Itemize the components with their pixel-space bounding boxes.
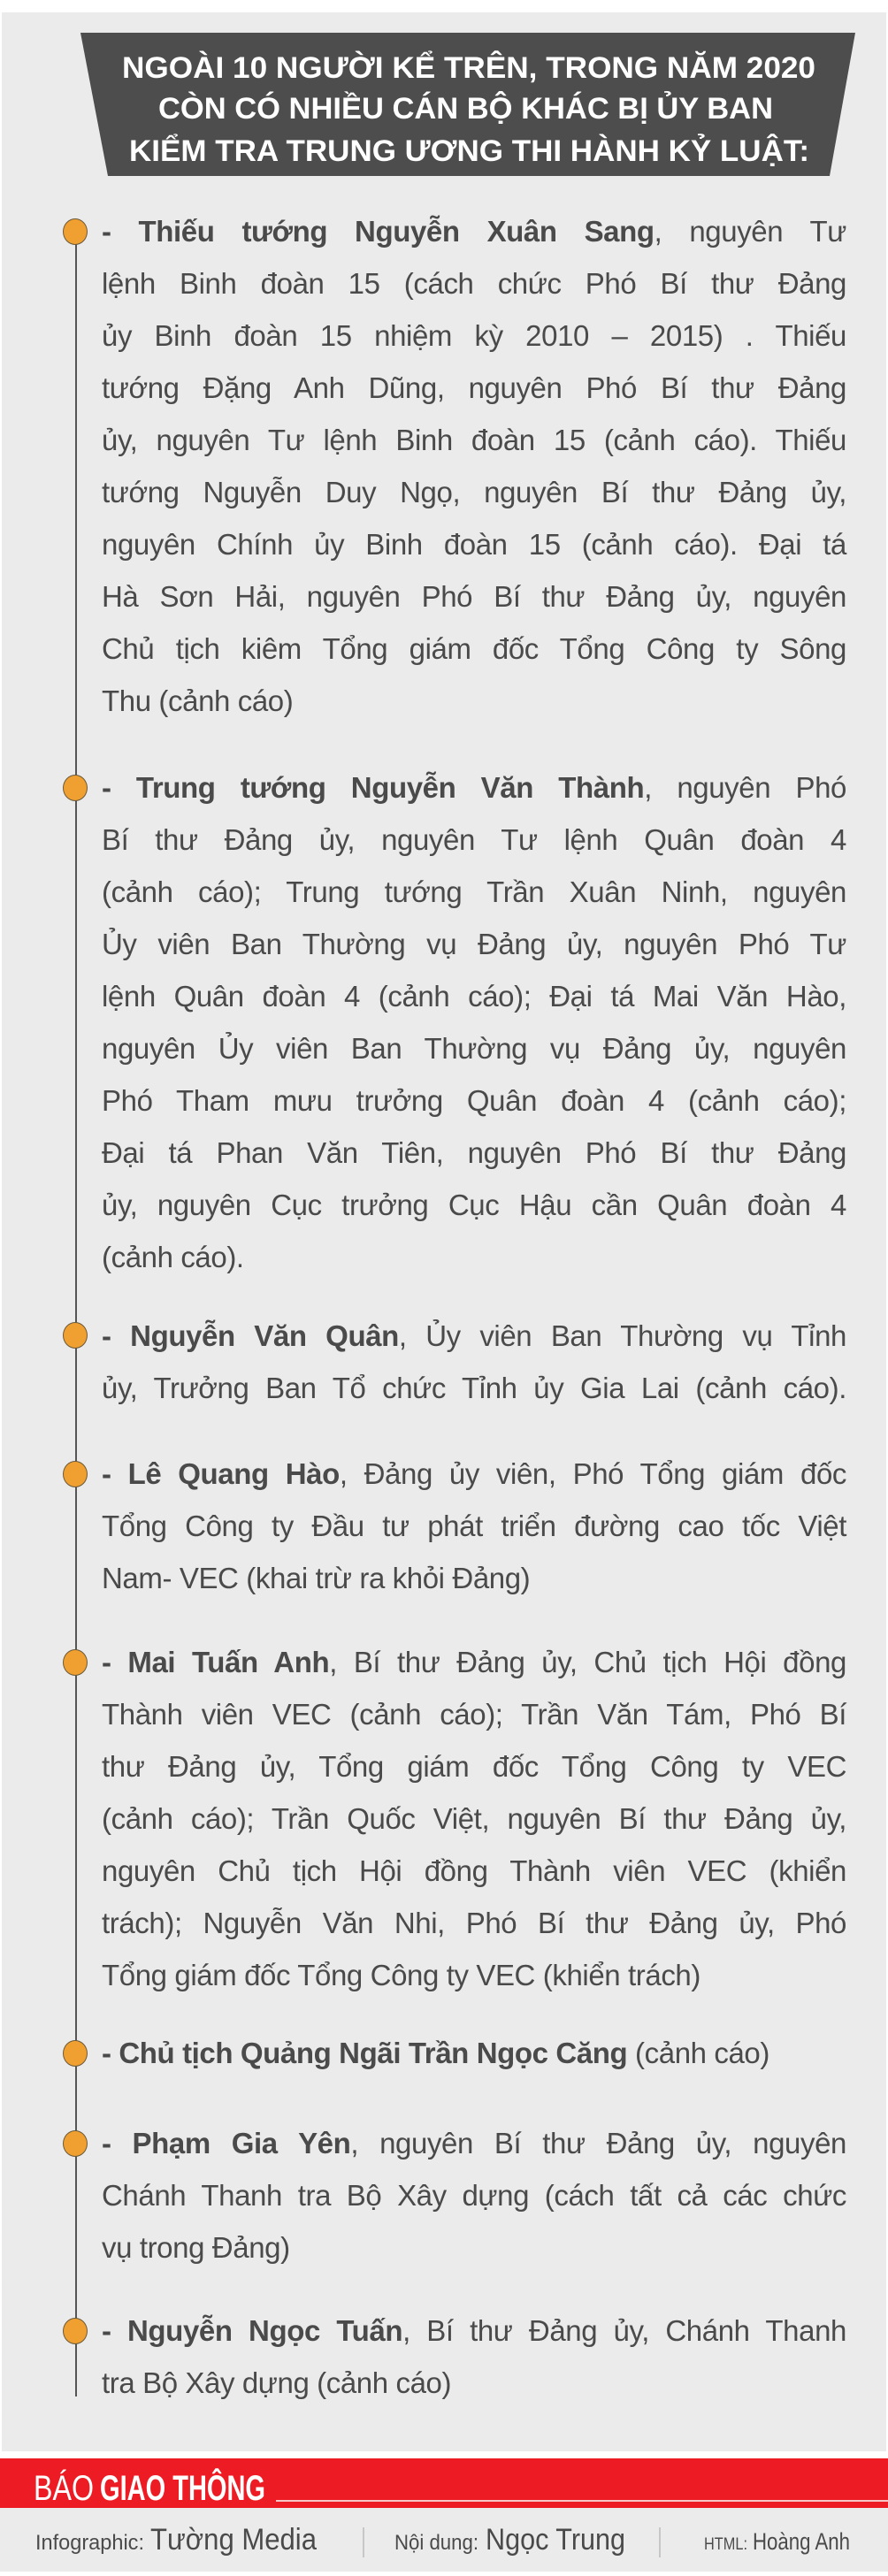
paragraph 1: lệnh Binh đoàn 15 (cách chức Phó Bí thư Đảng — [102, 267, 846, 300]
title banner: CÒN CÓ NHIỀU CÁN BỘ KHÁC BỊ ỦY BAN — [158, 91, 773, 126]
footer: credits: Tường Media — [150, 2523, 317, 2557]
bullet 8 — [63, 2318, 88, 2344]
paragraph 1: Hà Sơn Hải, nguyên Phó Bí thư Đảng ủy, nguyên — [102, 580, 846, 613]
paragraph 1: ủy, nguyên Tư lệnh Binh đoàn 15 (cảnh cáo). Thiếu — [102, 424, 846, 456]
logo: BÁO — [34, 2468, 94, 2508]
footer: credits: HTML: — [704, 2535, 747, 2554]
timeline line — [75, 232, 77, 2396]
footer: credits: Nội dung: — [394, 2531, 478, 2555]
paragraph 1: nguyên Chính ủy Binh đoàn 15 (cảnh cáo). Đại tá — [102, 528, 846, 561]
paragraph 7 — [102, 2127, 846, 2264]
paragraph 2: lệnh Quân đoàn 4 (cảnh cáo); Đại tá Mai Văn Hào, — [102, 980, 846, 1013]
paragraph 2: Ủy viên Ban Thường vụ Đảng ủy, nguyên Phó Tư — [102, 928, 846, 960]
paragraph 4: Nam- VEC (khai trừ ra khỏi Đảng) — [102, 1562, 530, 1594]
footer: credits — [0, 2508, 888, 2572]
paragraph 5: (cảnh cáo); Trần Quốc Việt, nguyên Bí thư Đảng ủy, — [102, 1802, 846, 1835]
paragraph 2: nguyên Ủy viên Ban Thường vụ Đảng ủy, nguyên — [102, 1032, 846, 1065]
title banner — [80, 33, 855, 176]
footer: credits: Hoàng Anh — [753, 2528, 850, 2555]
paragraph 2: (cảnh cáo); Trung tướng Trần Xuân Ninh, nguyên — [102, 875, 846, 908]
paragraph 7: vụ trong Đảng) — [102, 2231, 290, 2264]
paragraph 5: Tổng giám đốc Tổng Công ty VEC (khiển trách) — [102, 1959, 700, 1991]
paragraph 1: Thu (cảnh cáo) — [102, 684, 293, 717]
paragraph 7: - Phạm Gia Yên, nguyên Bí thư Đảng ủy, nguyên — [102, 2127, 846, 2159]
paragraph 3: - Nguyễn Văn Quân, Ủy viên Ban Thường vụ Tỉnh — [102, 1319, 846, 1352]
footer: red logo bar — [0, 2458, 888, 2508]
paragraph 2 — [102, 771, 846, 1273]
paragraph 2: Bí thư Đảng ủy, nguyên Tư lệnh Quân đoàn 4 — [102, 823, 846, 856]
paragraph 5: trách); Nguyễn Văn Nhi, Phó Bí thư Đảng ủy, Phó — [102, 1907, 846, 1939]
bullet 4 — [63, 1461, 88, 1487]
logo: GIAO THÔNG — [100, 2467, 265, 2508]
title banner: NGOÀI 10 NGƯỜI KỂ TRÊN, TRONG NĂM 2020 — [122, 51, 815, 85]
paragraph 5 — [102, 1646, 847, 1991]
footer: credits: Ngọc Trung — [486, 2523, 625, 2557]
paragraph 8 — [102, 2314, 846, 2399]
paragraph 1: tướng Đặng Anh Dũng, nguyên Phó Bí thư Đảng — [102, 371, 846, 404]
bullet 3 — [63, 1322, 88, 1349]
bullet 6 — [63, 2040, 88, 2067]
footer: credits: Infographic: — [35, 2531, 144, 2555]
title banner: KIỂM TRA TRUNG ƯƠNG THI HÀNH KỶ LUẬT: — [129, 134, 809, 168]
paragraph 5: nguyên Chủ tịch Hội đồng Thành viên VEC (khiển — [102, 1854, 846, 1887]
logo — [34, 2467, 265, 2508]
paragraph 2: - Trung tướng Nguyễn Văn Thành, nguyên Phó — [102, 771, 846, 804]
paragraph 2: Phó Tham mưu trưởng Quân đoàn 4 (cảnh cáo); — [102, 1084, 846, 1117]
bullet 1 — [63, 218, 88, 245]
paragraph 2: (cảnh cáo). — [102, 1241, 244, 1273]
paragraph 5: Thành viên VEC (cảnh cáo); Trần Văn Tám, Phó Bí — [102, 1698, 846, 1731]
paragraph 1: - Thiếu tướng Nguyễn Xuân Sang, nguyên Tư — [102, 215, 846, 248]
bullet 5 — [63, 1649, 88, 1676]
paragraph 8: tra Bộ Xây dựng (cảnh cáo) — [102, 2366, 451, 2399]
paragraph 8: - Nguyễn Ngọc Tuấn, Bí thư Đảng ủy, Chánh Thanh — [102, 2314, 846, 2347]
paragraph 3 — [102, 1319, 846, 1404]
bullet 7 — [63, 2130, 88, 2157]
paragraph 4: Tổng Công ty Đầu tư phát triển đường cao tốc Việt — [102, 1510, 846, 1542]
paragraph 6: - Chủ tịch Quảng Ngãi Trần Ngọc Căng (cảnh cáo) — [102, 2037, 769, 2069]
paragraph 4 — [102, 1457, 847, 1594]
paragraph 1: Chủ tịch kiêm Tổng giám đốc Tổng Công ty Sông — [102, 632, 846, 665]
paragraph 2: ủy, nguyên Cục trưởng Cục Hậu cần Quân đoàn 4 — [102, 1189, 846, 1221]
paragraph 3: ủy, Trưởng Ban Tổ chức Tỉnh ủy Gia Lai (cảnh cáo). — [102, 1372, 846, 1404]
paragraph 1: tướng Nguyễn Duy Ngọ, nguyên Bí thư Đảng ủy, — [102, 476, 846, 508]
paragraph 7: Chánh Thanh tra Bộ Xây dựng (cách tất cả các chức — [102, 2179, 846, 2212]
paragraph 1 — [102, 215, 847, 717]
paragraph 1: ủy Binh đoàn 15 nhiệm kỳ 2010 – 2015) . Thiếu — [102, 319, 846, 352]
paragraph 4: - Lê Quang Hào, Đảng ủy viên, Phó Tổng giám đốc — [102, 1457, 846, 1490]
paragraph 5: - Mai Tuấn Anh, Bí thư Đảng ủy, Chủ tịch Hội đồng — [102, 1646, 846, 1678]
bullet 2 — [63, 775, 88, 801]
paragraph 2: Đại tá Phan Văn Tiên, nguyên Phó Bí thư Đảng — [102, 1136, 846, 1169]
paragraph 5: thư Đảng ủy, Tổng giám đốc Tổng Công ty VEC — [102, 1750, 846, 1783]
